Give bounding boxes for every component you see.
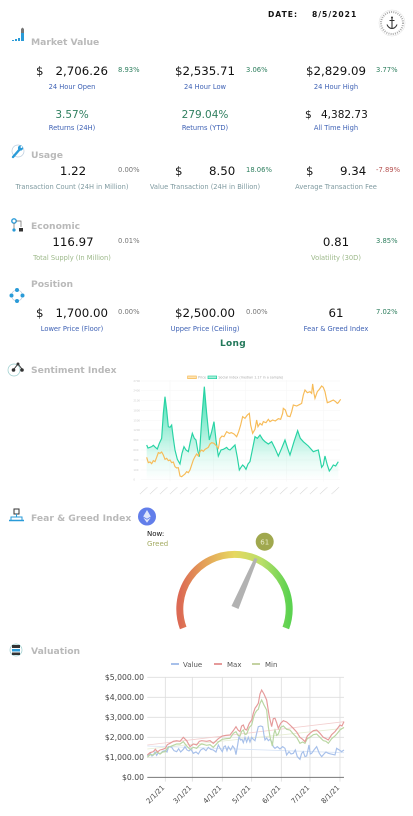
chart axis labels: 100 bbox=[133, 468, 139, 472]
x axis labels: 3/1/21 bbox=[172, 784, 193, 805]
gauge needle bbox=[232, 558, 258, 609]
y axis labels: $4,000.00 bbox=[105, 693, 144, 702]
icon: four points bbox=[10, 288, 24, 303]
metric: volatility bbox=[311, 235, 398, 262]
metric: transaction count: 1.22 bbox=[60, 164, 86, 178]
metric: returns 24h: 3.57% bbox=[55, 109, 89, 121]
legend: Value bbox=[183, 661, 202, 669]
metric: lower price: Lower Price (Floor) bbox=[41, 325, 104, 333]
metric: value transaction bbox=[150, 164, 272, 191]
heading: market value: Market Value bbox=[31, 37, 99, 48]
metric: lower price bbox=[36, 306, 140, 333]
chart axis labels: 1500 bbox=[133, 418, 140, 422]
metric: total supply: 0.01% bbox=[118, 237, 140, 245]
chart: price vs sentiment bbox=[133, 376, 341, 494]
metric: 24 hour low: 3.06% bbox=[246, 66, 268, 74]
y axis labels: $0.00 bbox=[122, 773, 144, 782]
heading: sentiment index: Sentiment Index bbox=[31, 365, 117, 376]
panel: sentiment index bbox=[8, 362, 341, 494]
metric: upper price: Upper Price (Ceiling) bbox=[171, 325, 240, 333]
metric: 24 hour high: 24 Hour High bbox=[314, 83, 358, 91]
x axis labels: 6/1/21 bbox=[261, 784, 282, 805]
metric: 24 hour high: 3.77% bbox=[376, 66, 398, 74]
metric: upper price: 0.00% bbox=[246, 308, 268, 316]
metric: average transaction fee: -7.89% bbox=[376, 166, 401, 174]
panel: usage bbox=[12, 145, 401, 191]
legend: Min bbox=[265, 661, 277, 669]
price line bbox=[147, 384, 341, 477]
metric: volatility: 3.85% bbox=[376, 237, 398, 245]
heading: fear and greed: Fear & Greed Index bbox=[31, 513, 131, 524]
x axis labels: 8/1/21 bbox=[320, 784, 341, 805]
metric: returns ytd: 279.04% bbox=[182, 109, 228, 121]
metric: fear and greed: 7.02% bbox=[376, 308, 398, 316]
chart axis labels bbox=[133, 379, 140, 482]
metric: 24 hour high bbox=[306, 64, 398, 91]
value series bbox=[147, 726, 344, 759]
sentiment line bbox=[147, 387, 338, 471]
x axis labels: 2/1/21 bbox=[145, 784, 166, 805]
icon: ethereum bbox=[138, 508, 156, 526]
metric: 24 hour open: 24 Hour Open bbox=[49, 83, 95, 91]
metric: returns 24h: Returns (24H) bbox=[49, 124, 96, 132]
metric: all time high: All Time High bbox=[314, 124, 358, 132]
metric: 24 hour open: $ bbox=[36, 64, 44, 78]
metric: volatility: Volatility (30D) bbox=[311, 254, 361, 262]
max series bbox=[147, 690, 344, 755]
metric: 24 hour low: 24 Hour Low bbox=[184, 83, 227, 91]
metric: transaction count: Transaction Count (24H in Million) bbox=[14, 183, 129, 191]
chart: valuation bbox=[105, 661, 344, 805]
metric: 24 hour high: $2,829.09 bbox=[306, 64, 366, 78]
trend lines bbox=[147, 722, 344, 753]
metric: 24 hour low bbox=[175, 64, 268, 91]
x axis labels: 4/1/21 bbox=[202, 784, 223, 805]
chart axis labels: 1200 bbox=[133, 428, 140, 432]
y axis labels: $1,000.00 bbox=[105, 753, 144, 762]
y axis labels: $2,000.00 bbox=[105, 733, 144, 742]
metric: transaction count bbox=[14, 164, 140, 191]
metric: average transaction fee bbox=[295, 164, 401, 191]
chart axis labels: 1800 bbox=[133, 408, 140, 412]
chart axis labels: 600 bbox=[133, 448, 139, 452]
metric: average transaction fee: 9.34 bbox=[340, 164, 366, 178]
icon: nodes bbox=[12, 219, 23, 232]
metric: fear and greed: Fear & Greed Index bbox=[304, 325, 368, 333]
metric: total supply: Total Supply (In Million) bbox=[32, 254, 111, 262]
metric: 24 hour low: $2,535.71 bbox=[175, 64, 235, 78]
chart gridlines bbox=[141, 380, 340, 482]
sentiment area series bbox=[147, 387, 338, 480]
icon: coin database bbox=[10, 644, 22, 656]
metric: total supply bbox=[32, 235, 140, 262]
metric: fear and greed bbox=[304, 306, 398, 333]
chart axis labels: 0 bbox=[133, 478, 135, 482]
heading: valuation: Valuation bbox=[31, 646, 80, 657]
metric: 24 hour open: 8.93% bbox=[118, 66, 140, 74]
chart axis labels: 900 bbox=[133, 438, 139, 442]
metric: all time high: $ bbox=[305, 109, 312, 121]
legend bbox=[171, 661, 277, 669]
chart legend bbox=[188, 376, 284, 380]
metric: average transaction fee: Average Transaction Fee bbox=[295, 183, 377, 191]
metric: all time high: 4,382.73 bbox=[321, 109, 368, 121]
icon: anchor logo bbox=[379, 10, 405, 36]
chart axis labels: 2100 bbox=[133, 399, 140, 403]
metric: all time high bbox=[305, 109, 368, 132]
metric: value transaction: 8.50 bbox=[209, 164, 235, 178]
metric: value transaction: $ bbox=[175, 164, 183, 178]
baseline axis bbox=[147, 776, 344, 779]
heading: economic: Economic bbox=[31, 221, 80, 232]
panel: fear and greed index bbox=[9, 508, 289, 628]
date header: 8/5/2021 bbox=[312, 10, 357, 19]
now label bbox=[147, 530, 168, 548]
panel: valuation bbox=[10, 644, 344, 805]
now label: Now: bbox=[147, 530, 164, 538]
gauge value badge: 61 bbox=[260, 538, 269, 546]
metric: lower price: $ bbox=[36, 306, 44, 320]
legend: Max bbox=[227, 661, 241, 669]
x axis labels: 5/1/21 bbox=[231, 784, 252, 805]
y axis labels: $3,000.00 bbox=[105, 713, 144, 722]
position label: long: Long bbox=[220, 339, 246, 349]
icon: market chart bbox=[12, 28, 24, 41]
x axis labels: 7/1/21 bbox=[290, 784, 311, 805]
metric: volatility: 0.81 bbox=[323, 235, 349, 249]
heading: usage: Usage bbox=[31, 150, 63, 161]
icon: institution bbox=[9, 509, 24, 520]
metric: lower price: 1,700.00 bbox=[56, 306, 108, 320]
heading: position: Position bbox=[31, 279, 73, 290]
chart legend: Price bbox=[198, 376, 206, 380]
metric: 24 hour open bbox=[36, 64, 140, 91]
metric: transaction count: 0.00% bbox=[118, 166, 140, 174]
icon: wrench bbox=[12, 145, 24, 157]
metric: returns ytd bbox=[182, 109, 229, 132]
gauge bbox=[180, 533, 289, 628]
grid bbox=[147, 677, 344, 782]
min series bbox=[147, 700, 344, 757]
now label: Greed bbox=[147, 540, 168, 548]
panel: market value bbox=[12, 28, 398, 132]
metric: value transaction: 18.06% bbox=[246, 166, 272, 174]
metric: lower price: 0.00% bbox=[118, 308, 140, 316]
metric: upper price bbox=[171, 306, 268, 333]
chart axis labels: 2700 bbox=[133, 379, 140, 383]
panel: position bbox=[10, 279, 398, 349]
metric: 24 hour open: 2,706.26 bbox=[56, 64, 108, 78]
y axis labels bbox=[105, 673, 144, 782]
chart axis labels: 300 bbox=[133, 458, 139, 462]
chart legend: Social index (median 1.17 in a sample) bbox=[218, 376, 284, 380]
x axis labels bbox=[145, 784, 341, 805]
icon: sentiment nodes bbox=[8, 362, 24, 376]
chart date ticks bbox=[140, 487, 339, 494]
y axis labels: $5,000.00 bbox=[105, 673, 144, 682]
date header: DATE: bbox=[268, 10, 298, 19]
date header bbox=[268, 10, 357, 19]
gauge arc bbox=[180, 554, 289, 628]
metric: returns 24h bbox=[49, 109, 96, 132]
metric: value transaction: Value Transaction (24H in Billion) bbox=[150, 183, 261, 191]
chart axis labels: 2400 bbox=[133, 389, 140, 393]
metric: returns ytd: Returns (YTD) bbox=[182, 124, 229, 132]
metric: upper price: $2,500.00 bbox=[175, 306, 235, 320]
panel: economic bbox=[12, 219, 398, 262]
metric: total supply: 116.97 bbox=[52, 235, 94, 249]
metric: average transaction fee: $ bbox=[306, 164, 314, 178]
metric: fear and greed: 61 bbox=[328, 306, 344, 320]
